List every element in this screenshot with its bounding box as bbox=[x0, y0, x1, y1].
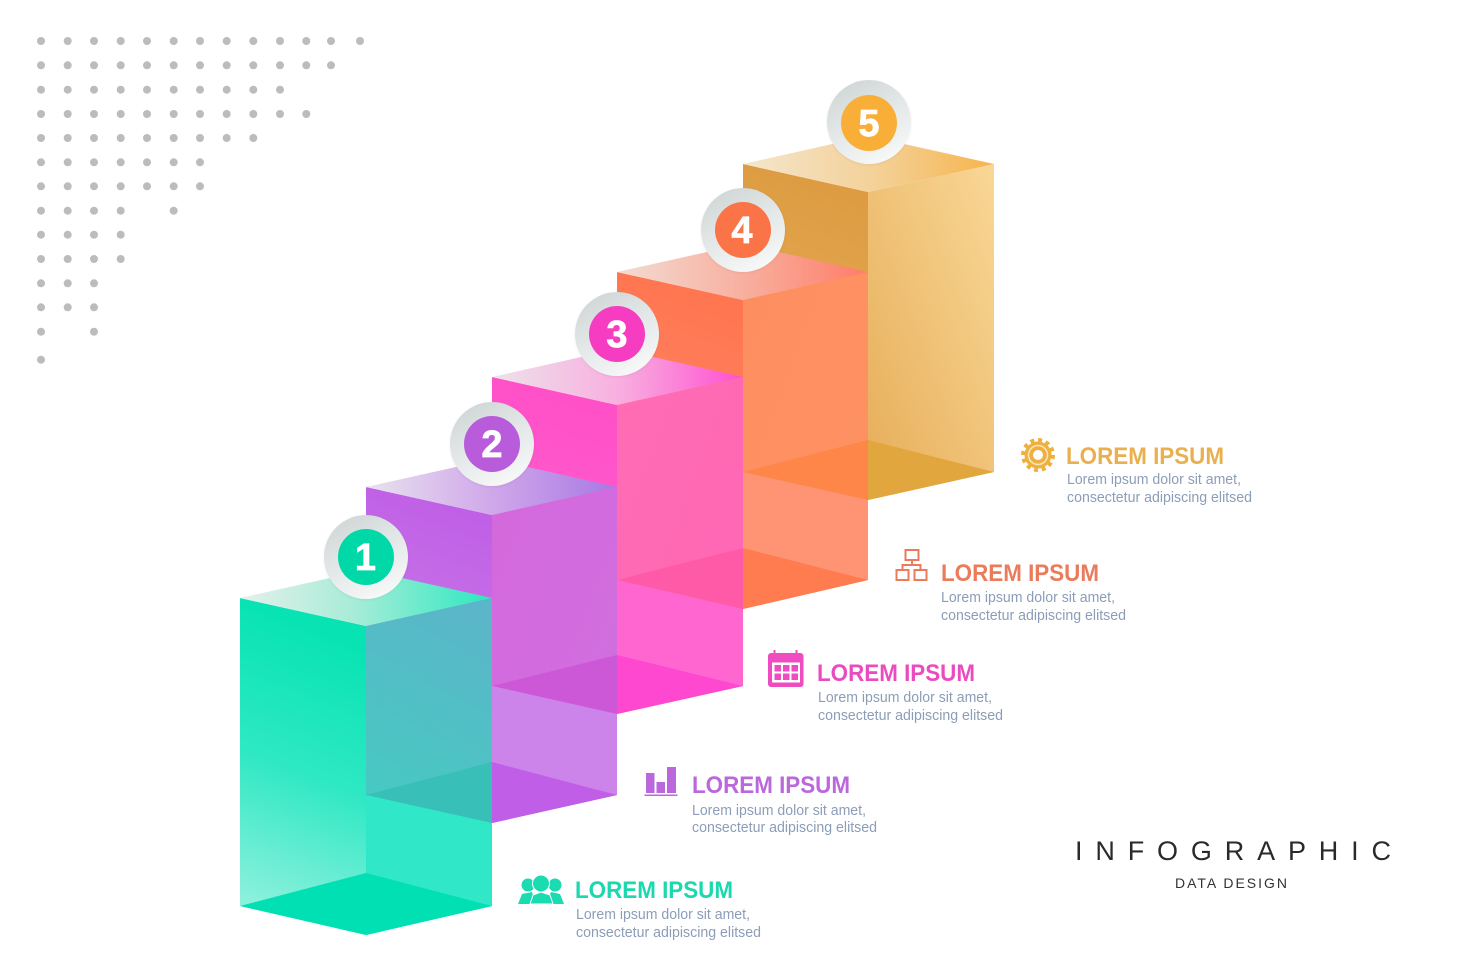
number badge 5: 5 bbox=[858, 103, 880, 145]
label: step 5 bbox=[1023, 440, 1252, 506]
number badge 4 bbox=[701, 188, 785, 273]
label: step 4: Lorem ipsum dolor sit amet, bbox=[941, 589, 1115, 606]
icon: people bbox=[518, 875, 564, 904]
number badge 5 bbox=[827, 80, 911, 165]
label: step 2: LOREM IPSUM bbox=[692, 772, 850, 799]
step 4 column bbox=[617, 188, 868, 609]
label: step 1: consectetur adipiscing elitsed bbox=[576, 924, 761, 941]
label: step 4: consectetur adipiscing elitsed bbox=[941, 607, 1126, 624]
icon: hierarchy bbox=[896, 550, 926, 580]
icon: gear bbox=[1023, 440, 1053, 470]
label: step 4: LOREM IPSUM bbox=[941, 560, 1099, 587]
step 2 column bbox=[366, 402, 617, 823]
subtitle: DATA DESIGN bbox=[1175, 875, 1287, 891]
dot pattern bbox=[37, 37, 364, 364]
label: step 2: Lorem ipsum dolor sit amet, bbox=[692, 802, 866, 819]
number badge 2: 2 bbox=[481, 424, 503, 466]
number badge 2 bbox=[450, 402, 534, 487]
number badge 3: 3 bbox=[606, 314, 628, 356]
label: step 2: consectetur adipiscing elitsed bbox=[692, 819, 877, 836]
number badge 1 bbox=[324, 515, 408, 600]
label: step 1: LOREM IPSUM bbox=[575, 877, 733, 904]
label: step 2 bbox=[644, 767, 877, 836]
icon: bar chart bbox=[644, 767, 678, 796]
label: step 4 bbox=[896, 550, 1126, 624]
icon: calendar bbox=[768, 650, 804, 687]
title bbox=[1075, 836, 1391, 891]
label: step 5: LOREM IPSUM bbox=[1066, 443, 1224, 470]
label: step 1: Lorem ipsum dolor sit amet, bbox=[576, 906, 750, 923]
step 5 column bbox=[743, 80, 994, 500]
label: step 3: Lorem ipsum dolor sit amet, bbox=[818, 689, 992, 706]
label: step 1 bbox=[518, 875, 761, 941]
label: step 5: consectetur adipiscing elitsed bbox=[1067, 489, 1252, 506]
step 3 column bbox=[492, 292, 743, 714]
label: step 3: LOREM IPSUM bbox=[817, 660, 975, 687]
label: step 3: consectetur adipiscing elitsed bbox=[818, 707, 1003, 724]
label: step 3 bbox=[768, 650, 1003, 724]
label: step 5: Lorem ipsum dolor sit amet, bbox=[1067, 471, 1241, 488]
number badge 4: 4 bbox=[731, 210, 753, 252]
number badge 1: 1 bbox=[355, 537, 376, 579]
title: INFOGRAPHIC bbox=[1075, 836, 1391, 866]
step 1 column bbox=[240, 515, 492, 935]
number badge 3 bbox=[575, 292, 659, 377]
